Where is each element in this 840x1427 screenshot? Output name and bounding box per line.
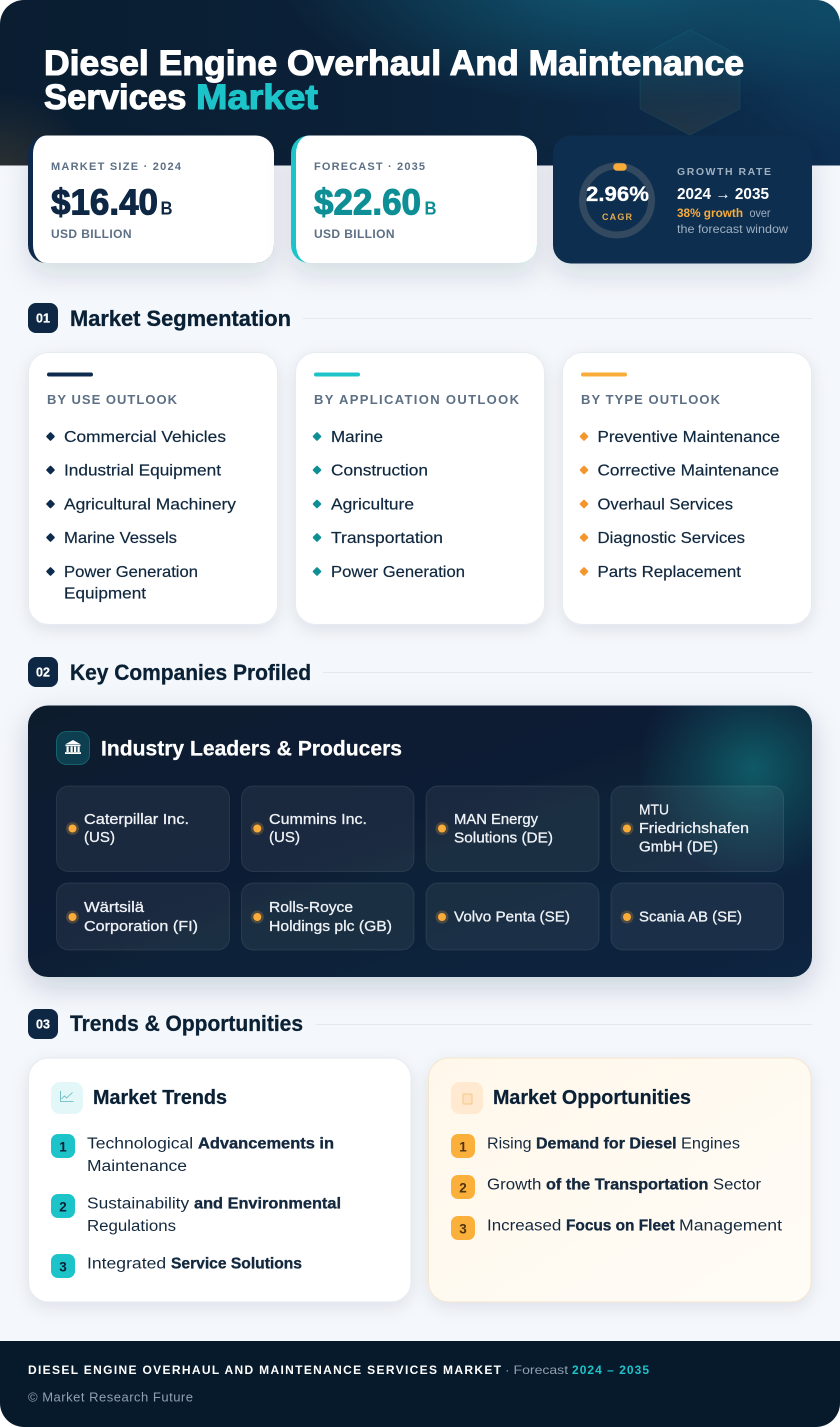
opportunity 3: 3 <box>459 1222 467 1236</box>
trend 2: Regulations <box>87 1218 176 1235</box>
CAGR ring: 2.96% <box>586 183 649 206</box>
trend 1: Technological <box>87 1136 198 1152</box>
opportunity 2: Sector <box>713 1176 761 1194</box>
company: MTU: GmbH (DE) <box>639 838 718 856</box>
trend 3: 3 <box>59 1260 67 1274</box>
panel: by use outlook: Commercial Vehicles <box>64 429 226 446</box>
trend 2: Sustainability <box>87 1196 194 1212</box>
company: Volvo Penta: Volvo Penta (SE) <box>454 908 570 926</box>
panel: by use outlook <box>28 352 278 624</box>
trend 1: Maintenance <box>87 1158 187 1175</box>
opportunity 1: Rising <box>487 1136 536 1152</box>
stat card: market size <box>28 136 274 263</box>
icon: decorative hexagon <box>640 30 740 135</box>
company: Cummins: Cummins Inc. <box>269 811 367 828</box>
panel: by use outlook: BY USE OUTLOOK <box>47 392 178 407</box>
section heading: market segmentation: Market Segmentation <box>70 306 291 331</box>
trend 2: 2 <box>59 1200 67 1214</box>
stat card: forecast: $22.60 <box>314 182 421 222</box>
title: Market <box>196 78 318 117</box>
panel: by application outlook: Agriculture <box>331 496 414 514</box>
stat card: market size: MARKET SIZE · 2024 <box>51 161 182 173</box>
opportunity 2 <box>451 1175 761 1199</box>
company: MAN Energy: MAN Energy <box>454 811 538 828</box>
icon: missing glyph box <box>451 1082 483 1114</box>
footer: 2024 – 2035 <box>572 1363 649 1377</box>
panel: market opportunities <box>428 1058 811 1302</box>
panel: by application outlook: BY APPLICATION OUTLOOK <box>314 392 520 407</box>
opportunity 2: Growth <box>487 1176 546 1194</box>
stat card: growth rate: GROWTH RATE <box>677 166 771 178</box>
footer <box>0 1341 840 1427</box>
panel: by application outlook: Marine <box>331 429 383 446</box>
trend 3 <box>51 1254 302 1278</box>
opportunity 1: 1 <box>459 1140 467 1154</box>
section heading: market segmentation <box>28 303 812 333</box>
opportunity 3 <box>451 1216 783 1240</box>
company: Rolls-Royce <box>242 883 414 950</box>
panel: by application outlook <box>296 352 544 624</box>
company: MTU: MTU <box>639 802 669 818</box>
section heading: key companies: Key Companies Profiled <box>70 660 311 685</box>
company: Caterpillar: (US) <box>84 829 115 846</box>
panel: by type outlook: Corrective Maintenance <box>598 462 779 480</box>
stat card: market size: B <box>160 198 172 218</box>
opportunity 2: of the Transportation <box>546 1176 713 1194</box>
title <box>44 44 744 117</box>
stat card: forecast: FORECAST · 2035 <box>314 161 425 173</box>
opportunity 3: Management <box>679 1218 783 1234</box>
panel: by use outlook: Industrial Equipment <box>64 462 222 480</box>
company: Cummins: (US) <box>269 829 300 846</box>
title: Services <box>44 78 196 117</box>
company: Rolls-Royce: Holdings plc (GB) <box>269 918 392 935</box>
opportunity 3: Focus on Fleet <box>566 1218 679 1234</box>
panel: by use outlook: Agricultural Machinery <box>64 496 236 514</box>
stat card: forecast: USD BILLION <box>314 227 394 241</box>
section heading: key companies <box>28 657 812 687</box>
company: MTU <box>611 786 784 872</box>
stat card: market size: USD BILLION <box>51 227 132 241</box>
stat card: growth rate: the forecast window <box>677 222 788 236</box>
section heading: trends and opportunities: Trends & Opportunities <box>70 1011 303 1036</box>
panel: by use outlook: Marine Vessels <box>64 530 177 547</box>
panel: by application outlook: Transportation <box>331 530 443 547</box>
panel: market trends <box>28 1058 411 1302</box>
section heading: trends and opportunities <box>28 1009 812 1039</box>
panel: by type outlook: Diagnostic Services <box>598 530 745 547</box>
company: MAN Energy: Solutions (DE) <box>454 830 553 846</box>
company: Caterpillar <box>56 786 230 872</box>
company: Wartsila: Wärtsilä <box>84 899 145 916</box>
stat card: growth rate: 38% growth <box>677 206 743 220</box>
stat card: forecast: B <box>424 198 436 218</box>
panel: by type outlook <box>562 352 812 624</box>
section heading: trends and opportunities: 03 <box>36 1018 50 1032</box>
company: Wartsila: Corporation (FI) <box>84 918 198 935</box>
opportunity 1 <box>451 1134 740 1158</box>
footer: DIESEL ENGINE OVERHAUL AND MAINTENANCE SERVICES MARKET <box>28 1363 502 1377</box>
trend 2 <box>51 1194 341 1235</box>
company: Caterpillar: Caterpillar Inc. <box>84 811 189 828</box>
panel: industry leaders <box>28 706 812 977</box>
section heading: market segmentation: 01 <box>36 312 50 326</box>
trend 1: 1 <box>59 1140 67 1154</box>
trend 1 <box>51 1134 334 1175</box>
company: MAN Energy <box>426 786 599 872</box>
icon: institution building <box>56 732 90 764</box>
trend 1: Advancements in <box>198 1136 334 1152</box>
footer: · Forecast <box>505 1363 572 1377</box>
company: Rolls-Royce: Rolls-Royce <box>269 899 353 916</box>
panel: industry leaders: Industry Leaders & Producers <box>101 736 402 760</box>
trend 2: and Environmental <box>194 1196 341 1212</box>
stat card: forecast <box>291 136 537 263</box>
panel: by use outlook: Equipment <box>64 586 147 602</box>
icon: line chart <box>51 1082 83 1114</box>
trend 3: Service Solutions <box>171 1256 302 1272</box>
opportunity 3: Increased <box>487 1218 566 1234</box>
panel: by type outlook: Preventive Maintenance <box>598 429 780 446</box>
panel: by application outlook: Construction <box>331 462 428 480</box>
stat card: growth rate: over <box>746 206 770 220</box>
panel: market opportunities: Market Opportunities <box>493 1087 691 1109</box>
stat card: market size: $16.40 <box>51 182 158 222</box>
section heading: key companies: 02 <box>36 666 50 680</box>
trend 3: Integrated <box>87 1256 171 1272</box>
opportunity 1: Engines <box>681 1136 740 1152</box>
opportunity 2: 2 <box>459 1180 467 1196</box>
panel: by application outlook: Power Generation <box>331 564 465 581</box>
title: Diesel Engine Overhaul And Maintenance <box>44 44 744 83</box>
stat card: growth rate: 2024 → 2035 <box>677 186 769 203</box>
company: Cummins <box>242 786 414 872</box>
footer: © Market Research Future <box>28 1390 193 1404</box>
CAGR ring: CAGR <box>602 212 632 222</box>
stat card: growth rate <box>553 136 812 264</box>
panel: by use outlook: Power Generation <box>64 564 198 581</box>
opportunity 1: Demand for Diesel <box>536 1136 681 1152</box>
header banner <box>0 0 840 166</box>
panel: market trends: Market Trends <box>93 1087 227 1109</box>
company: Volvo Penta <box>426 883 599 950</box>
company: MTU: Friedrichshafen <box>639 820 749 837</box>
company: Wartsila <box>56 883 230 950</box>
panel: by type outlook: Overhaul Services <box>598 496 733 514</box>
CAGR ring <box>582 166 652 235</box>
panel: by type outlook: BY TYPE OUTLOOK <box>581 392 721 407</box>
company: Scania: Scania AB (SE) <box>639 908 742 926</box>
panel: by type outlook: Parts Replacement <box>598 564 742 581</box>
company: Scania <box>611 883 784 950</box>
